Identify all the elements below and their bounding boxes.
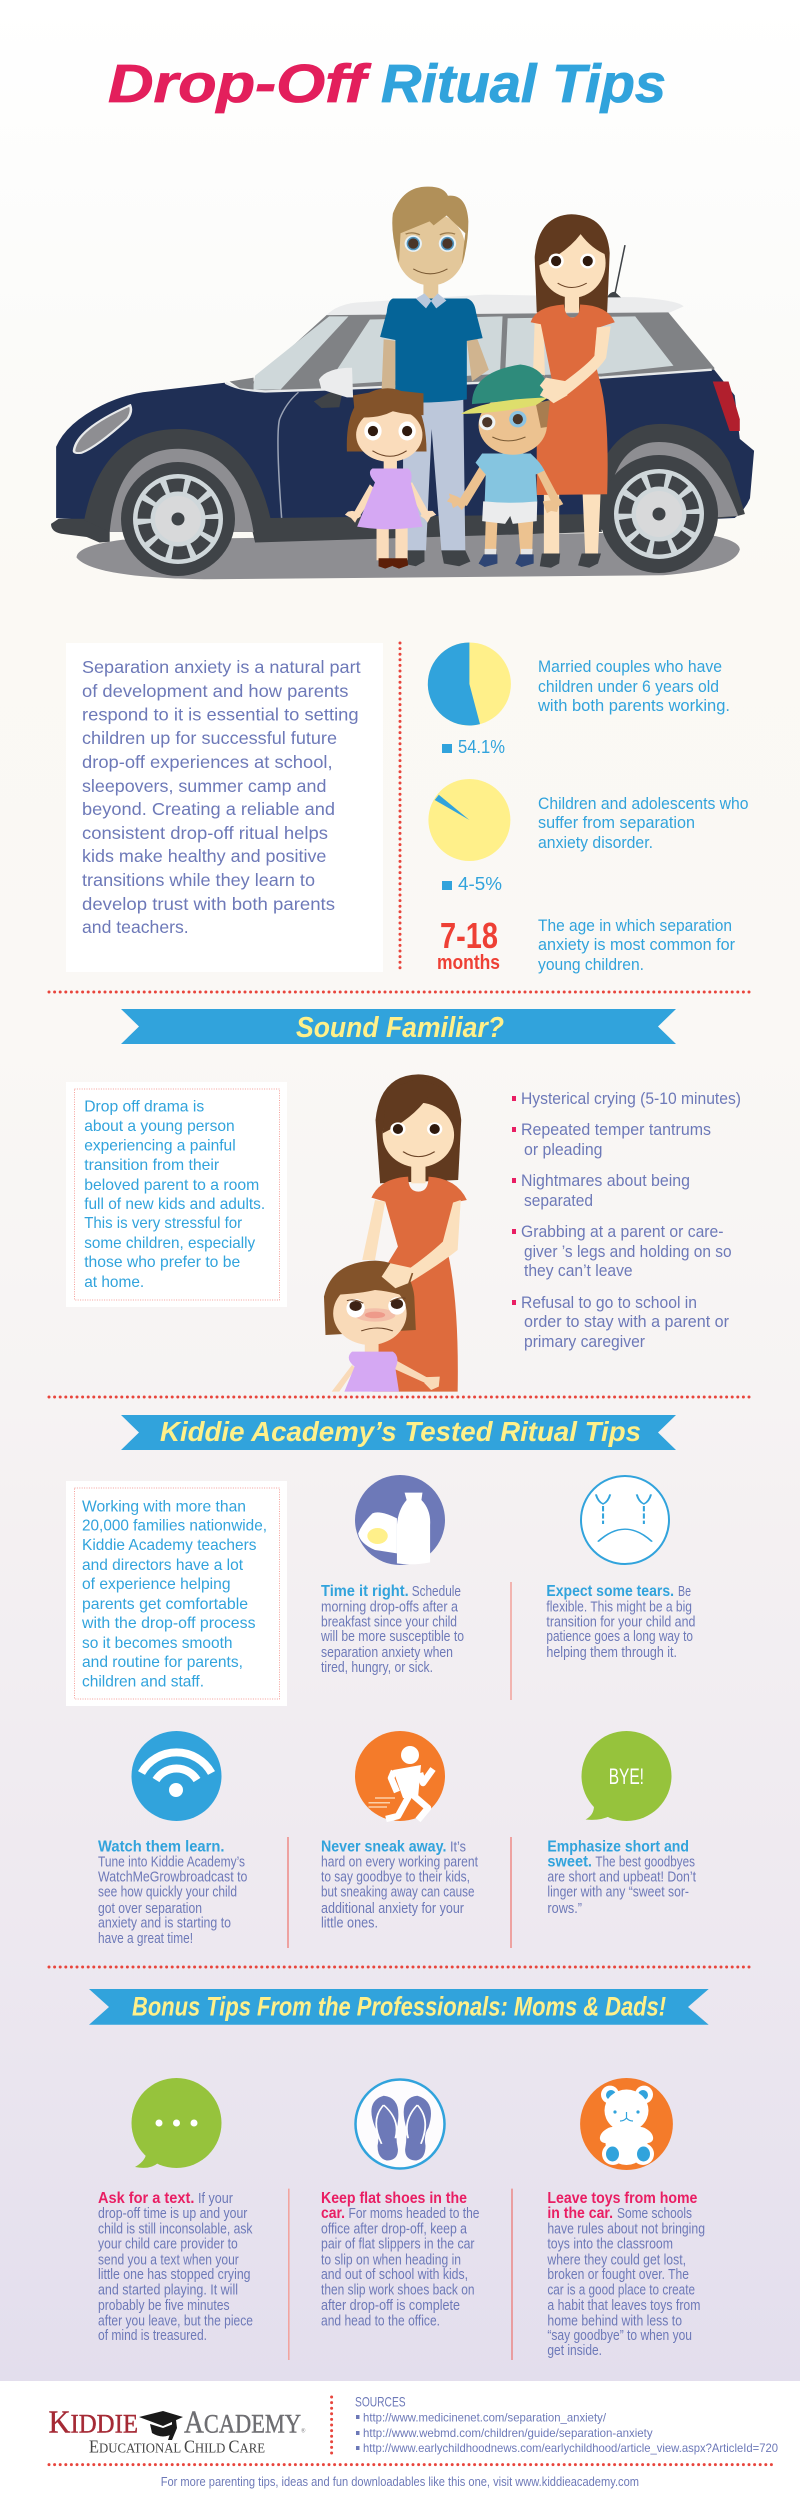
- tip: leave toys from home: get inside.: [547, 2343, 602, 2359]
- tip: leave toys from home: “say goodbye” to when you: [547, 2328, 692, 2344]
- tip: time it right: morning drop-offs after a: [321, 1599, 459, 1615]
- stat text: children and adolescents: anxiety disorder.: [538, 834, 653, 852]
- working with families text: Working with more than: [82, 1499, 246, 1516]
- tip: never sneak away: but sneaking away can cause: [321, 1885, 474, 1901]
- tip: expect some tears: [546, 1583, 695, 1661]
- tip: leave toys from home: car is a good place to create: [547, 2282, 695, 2298]
- symptoms list: Hysterical crying (5-10 minutes): [521, 1090, 741, 1108]
- footer call to action: For more parenting tips, ideas and fun downloadables like this one, visit www.kiddieacademy.com: [161, 2474, 639, 2489]
- tip: ask for a text: your child care provider to: [98, 2236, 238, 2252]
- intro paragraph: beyond. Creating a reliable and: [82, 799, 335, 819]
- symptoms list: primary caregiver: [524, 1333, 645, 1351]
- illustration: family standing by the car: [51, 187, 754, 579]
- tip: watch them learn: [98, 1839, 247, 1947]
- tip: watch them learn: WatchMeGrowbroadcast to: [98, 1870, 247, 1886]
- sources: SOURCES: [355, 2394, 406, 2410]
- footer panel: [0, 2381, 800, 2500]
- front wheel: [121, 462, 235, 576]
- tip: watch them learn: anxiety and is starting to: [98, 1915, 231, 1931]
- tip: time it right: Time it right.: [321, 1583, 409, 1600]
- logo: Kiddie Academy: ®: [301, 2427, 306, 2434]
- stat: 54.1% pie chart: 54.1%: [458, 736, 505, 757]
- intro paragraph: respond to it is essential to setting: [82, 705, 359, 725]
- intro paragraph: drop-off experiences at school,: [82, 752, 333, 772]
- intro paragraph: children up for successful future: [82, 728, 337, 748]
- tip: ask for a text: of mind is treasured.: [98, 2328, 207, 2344]
- tip: ask for a text: send you a text when your: [98, 2252, 239, 2268]
- tip: leave toys from home: where they could get lost,: [547, 2252, 686, 2268]
- tip: leave toys from home: [547, 2190, 705, 2359]
- tip: ask for a text: probably be five minutes: [98, 2298, 230, 2314]
- logo: Kiddie Academy: EDUCATIONAL CHILD CARE: [89, 2437, 265, 2457]
- drop off drama text: transition from their: [84, 1157, 220, 1174]
- tip: never sneak away: additional anxiety for your: [321, 1901, 464, 1917]
- tip: emphasize short and sweet: [547, 1839, 696, 1917]
- sources: http://www.medicinenet.com/separation_anxiety/: [363, 2410, 607, 2424]
- tip: keep flat shoes: to slip on when heading in: [321, 2252, 461, 2268]
- symptoms list: Refusal to go to school in: [521, 1294, 697, 1312]
- drop off drama text: at home.: [84, 1274, 144, 1291]
- logo: Kiddie Academy: KIDDIE: [48, 2403, 138, 2439]
- symptoms list: giver ’s legs and holding on so: [524, 1243, 732, 1261]
- girl: [345, 388, 436, 569]
- working with families text: parents get comfortable: [82, 1596, 248, 1613]
- tip: expect some tears: Be: [678, 1584, 691, 1600]
- working with families text: with the drop-off process: [81, 1615, 256, 1632]
- sources: http://www.earlychildhoodnews.com/earlychildhood/article_view.aspx?ArticleId=720: [363, 2441, 778, 2455]
- tip: never sneak away: little ones.: [321, 1915, 378, 1931]
- tip: leave toys from home: Some schools: [617, 2206, 692, 2222]
- intro paragraph: Separation anxiety is a natural part: [82, 657, 361, 677]
- tip: ask for a text: drop-off time is up and your: [98, 2206, 248, 2222]
- symptoms list: they can’t leave: [524, 1262, 633, 1280]
- sources: [355, 2394, 778, 2455]
- tip: keep flat shoes: [321, 2190, 480, 2330]
- tip: watch them learn: have a great time!: [98, 1931, 193, 1947]
- tip: time it right: [320, 1583, 464, 1676]
- tip: time it right: tired, hungry, or sick.: [321, 1660, 433, 1676]
- stat text: married couples: with both parents working.: [537, 697, 730, 715]
- tip: expect some tears: transition for your child and: [546, 1614, 695, 1630]
- stat: 7-18 months: 7-18: [440, 915, 498, 956]
- tip: expect some tears: patience goes a long way to: [546, 1629, 693, 1645]
- boy: [447, 365, 563, 567]
- symptoms list: separated: [524, 1192, 593, 1210]
- working with families text: [81, 1499, 267, 1691]
- working with families text: so it becomes smooth: [82, 1635, 232, 1652]
- tip: keep flat shoes: then slip work shoes back on: [321, 2282, 474, 2298]
- drop off drama text: full of new kids and adults.: [84, 1196, 265, 1213]
- tip: watch them learn: Watch them learn.: [98, 1839, 224, 1856]
- intro paragraph: of development and how parents: [82, 681, 349, 701]
- title: Drop-Off: [108, 54, 372, 114]
- working with families text: Kiddie Academy teachers: [82, 1537, 256, 1554]
- tip: ask for a text: [98, 2190, 253, 2344]
- tip: ask for a text: after you leave, but the piece: [98, 2314, 253, 2330]
- tip: leave toys from home: have rules about not bringing: [547, 2221, 705, 2237]
- icon: running person: [355, 1731, 445, 1821]
- tip: watch them learn: got over separation: [98, 1901, 202, 1917]
- icon: crying face: [581, 1476, 669, 1564]
- car body: [51, 245, 754, 542]
- tip: expect some tears: flexible. This might be a big: [546, 1599, 692, 1615]
- panel: working with families: [66, 1481, 287, 1706]
- tip: leave toys from home: Leave toys from home: [547, 2190, 698, 2207]
- stat: 7-18 months: months: [437, 952, 500, 974]
- tip: watch them learn: Tune into Kiddie Academy’s: [98, 1855, 245, 1871]
- tip: leave toys from home: broken or fought over. The: [547, 2267, 689, 2283]
- stat: 4-5% pie chart: 4-5%: [458, 873, 502, 894]
- tip: expect some tears: helping them through it.: [546, 1645, 677, 1661]
- intro paragraph: sleepovers, summer camp and: [82, 776, 326, 796]
- tip: emphasize short and sweet: linger with any “sweet sor-: [547, 1885, 689, 1901]
- drop off drama text: those who prefer to be: [84, 1254, 240, 1271]
- tip: ask for a text: little one has stopped crying: [98, 2267, 250, 2283]
- stat text: children and adolescents: suffer from separation: [538, 814, 695, 832]
- drop off drama text: [84, 1099, 265, 1291]
- tip: leave toys from home: toys into the classroom: [547, 2236, 673, 2252]
- stat text: married couples: [537, 658, 730, 715]
- tip: emphasize short and sweet: sweet.: [547, 1854, 592, 1871]
- tip: keep flat shoes: and out of school with kids,: [321, 2267, 468, 2283]
- working with families text: children and staff.: [82, 1674, 204, 1691]
- drop off drama text: This is very stressful for: [84, 1215, 243, 1232]
- working with families text: 20,000 families nationwide,: [82, 1518, 267, 1535]
- tip: leave toys from home: home behind with less to: [547, 2314, 682, 2330]
- tip: never sneak away: [321, 1839, 478, 1931]
- stat text: children and adolescents: Children and adolescents who: [538, 795, 748, 813]
- symptoms list: Nightmares about being: [521, 1172, 690, 1190]
- drop off drama text: Drop off drama is: [84, 1099, 204, 1116]
- tip: time it right: separation anxiety when: [321, 1645, 453, 1661]
- panel: drop off drama: [66, 1082, 287, 1307]
- tip: never sneak away: to say goodbye to their kids,: [321, 1870, 470, 1886]
- icon: flip flops: [356, 2080, 444, 2168]
- intro paragraph: and teachers.: [82, 917, 189, 937]
- tip: ask for a text: child is still inconsolable, ask: [98, 2221, 253, 2237]
- tip: never sneak away: It’s: [450, 1840, 466, 1856]
- tip: keep flat shoes: after drop-off is complete: [321, 2298, 460, 2314]
- logo: Kiddie Academy: ACADEMY: [184, 2403, 301, 2439]
- symptoms list: Repeated temper tantrums: [521, 1121, 711, 1139]
- tip: expect some tears: Expect some tears.: [546, 1583, 674, 1600]
- banner: Sound Familiar?: [121, 1009, 676, 1044]
- symptoms list: or pleading: [524, 1141, 602, 1159]
- title: [108, 54, 666, 114]
- tip: leave toys from home: a habit that leaves toys from: [547, 2298, 700, 2314]
- symptoms list: Grabbing at a parent or care-: [521, 1223, 724, 1241]
- tip: time it right: will be more susceptible to: [320, 1629, 464, 1645]
- title: Ritual Tips: [381, 54, 666, 114]
- tip: keep flat shoes: Keep flat shoes in the: [321, 2190, 467, 2207]
- tip: never sneak away: hard on every working parent: [321, 1855, 478, 1871]
- stat text: age: The age in which separation: [538, 917, 732, 935]
- tip: emphasize short and sweet: The best goodbyes: [595, 1855, 695, 1871]
- tip: keep flat shoes: pair of flat slippers in the car: [321, 2236, 475, 2252]
- tip: keep flat shoes: For moms headed to the: [348, 2206, 480, 2222]
- intro paragraph: [82, 657, 361, 937]
- mom's hand on boy's hat: [540, 378, 567, 403]
- intro paragraph: kids make healthy and positive: [82, 846, 326, 866]
- stat: 7-18 months: [437, 915, 500, 974]
- stat: 4-5% pie chart: [428, 779, 510, 894]
- tip: ask for a text: and started playing. It will: [98, 2282, 238, 2298]
- intro paragraph: develop trust with both parents: [82, 894, 335, 914]
- tip: leave toys from home: in the car.: [547, 2205, 613, 2222]
- tip: emphasize short and sweet: Emphasize short and: [547, 1839, 689, 1856]
- tip: ask for a text: Ask for a text.: [98, 2190, 194, 2207]
- icon: teddy bear: [580, 2078, 673, 2170]
- mom: [531, 214, 615, 568]
- stat text: age: [538, 917, 735, 974]
- banner: Sound Familiar?: Sound Familiar?: [296, 1012, 504, 1044]
- stat text: children and adolescents: [538, 795, 748, 852]
- tip: time it right: breakfast since your child: [321, 1614, 457, 1630]
- sources: http://www.webmd.com/children/guide/separation-anxiety: [363, 2426, 653, 2440]
- icon: milk and egg: [355, 1475, 445, 1565]
- intro paragraph: transitions while they learn to: [82, 870, 315, 890]
- tip: time it right: Schedule: [412, 1584, 461, 1600]
- working with families text: and directors have a lot: [82, 1557, 244, 1574]
- tip: emphasize short and sweet: rows.”: [547, 1901, 582, 1917]
- stat text: married couples: Married couples who have: [538, 658, 722, 676]
- intro paragraph: consistent drop-off ritual helps: [82, 823, 328, 843]
- panel: intro text: [66, 643, 383, 972]
- dad: [380, 187, 489, 566]
- tip: keep flat shoes: car.: [321, 2205, 345, 2222]
- working with families text: and routine for parents,: [82, 1654, 243, 1671]
- tip: never sneak away: Never sneak away.: [321, 1839, 446, 1856]
- stat text: age: young children.: [538, 956, 644, 974]
- rear wheel: [600, 455, 718, 573]
- symptoms list: order to stay with a parent or: [524, 1313, 729, 1331]
- tip: emphasize short and sweet: are short and upbeat! Don’t: [547, 1870, 696, 1886]
- tip: keep flat shoes: and head to the office.: [321, 2314, 440, 2330]
- banner: Kiddie Academy's Tested Ritual Tips: Kiddie Academy’s Tested Ritual Tips: [160, 1416, 641, 1447]
- icon: bye speech bubble: [582, 1731, 672, 1821]
- icon: wifi: [132, 1731, 222, 1821]
- stat text: age: anxiety is most common for: [538, 936, 735, 954]
- drop off drama text: about a young person: [84, 1118, 235, 1135]
- symptoms list: [512, 1090, 741, 1351]
- logo: Kiddie Academy: [48, 2403, 306, 2457]
- drop off drama text: experiencing a painful: [84, 1138, 236, 1155]
- drop off drama text: some children, especially: [84, 1235, 255, 1252]
- illustration: mother comforting crying girl: [324, 1074, 467, 1392]
- ground shadow: [77, 532, 740, 579]
- stat text: married couples: children under 6 years old: [538, 678, 719, 696]
- icon: bye speech bubble: BYE!: [609, 1764, 644, 1789]
- tip: keep flat shoes: office after drop-off, keep a: [321, 2221, 468, 2237]
- tip: watch them learn: see how quickly your child: [98, 1885, 237, 1901]
- drop off drama text: beloved parent to a room: [84, 1177, 259, 1194]
- banner: Bonus Tips: Bonus Tips From the Professionals: Moms & Dads!: [132, 1992, 666, 2022]
- working with families text: of experience helping: [82, 1576, 230, 1593]
- tip: ask for a text: If your: [198, 2191, 233, 2207]
- stat: 54.1% pie chart: [428, 642, 511, 757]
- icon: text message bubble: [132, 2078, 222, 2168]
